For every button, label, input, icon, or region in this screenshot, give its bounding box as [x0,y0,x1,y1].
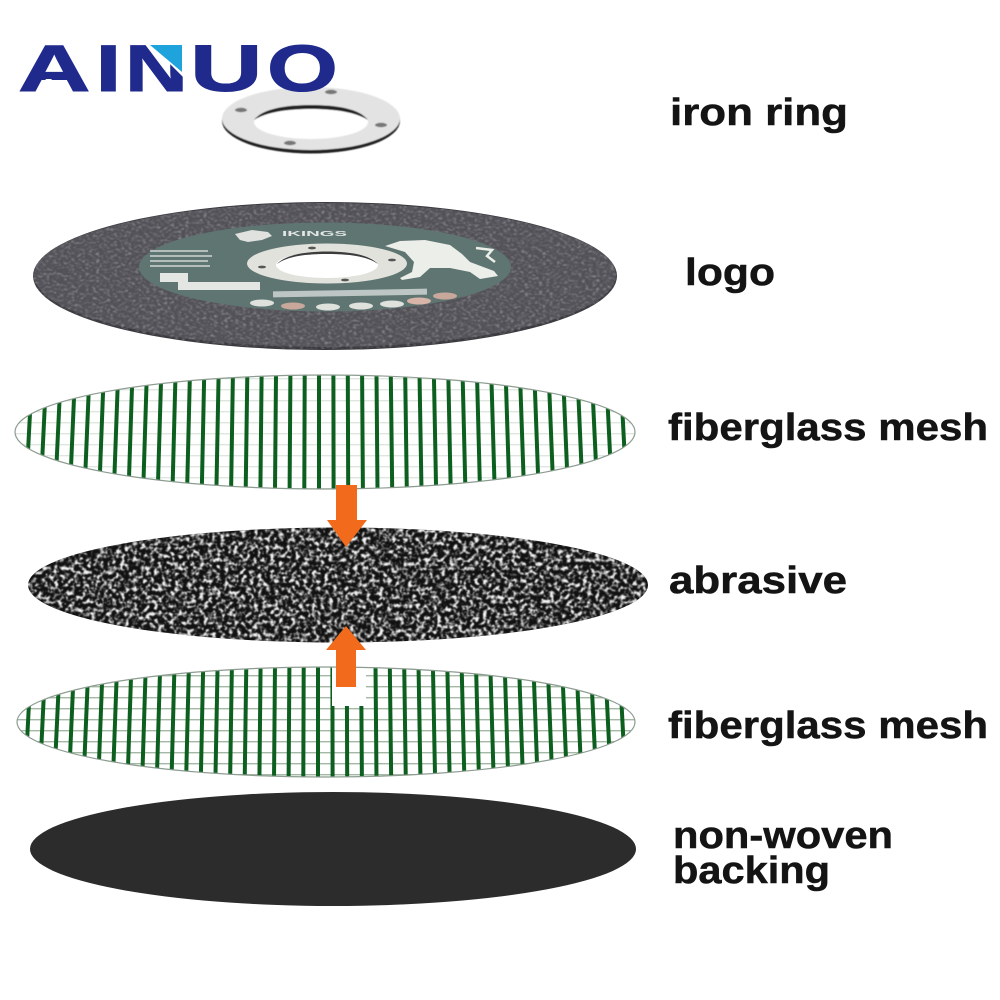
arrow: down [327,485,367,547]
label: abrasive: abrasive [669,560,847,602]
label: non-woven backing [673,815,893,892]
abrasive layer [26,526,650,644]
spec block [150,250,212,267]
iron ring [222,87,400,154]
logo: AINUO [18,31,338,106]
logo: AINUO: N [125,32,188,106]
lion emblem [385,240,498,280]
label: iron ring: iron ring [670,92,848,134]
label: fiberglass mesh top: fiberglass mesh [668,407,988,449]
label: fiberglass mesh bottom: fiberglass mesh [668,705,988,747]
fiberglass mesh (bottom) [15,660,637,780]
non-woven backing [30,792,636,906]
cutting disc with logo label [30,200,620,352]
disc label [139,222,511,312]
label: non-woven backing: non-woven [673,815,893,857]
logo: AINUO: A [18,31,90,105]
label: non-woven backing: backing [673,850,830,892]
row of badges [250,292,457,310]
arrow: up [326,626,366,687]
label: logo: logo [685,252,775,294]
fiberglass mesh (top) [15,375,635,490]
logo: AINUO: U [190,31,262,105]
logo: AINUO: I [96,32,121,106]
brand mark: IKINGS [282,231,348,238]
logo: AINUO: O [267,31,338,105]
